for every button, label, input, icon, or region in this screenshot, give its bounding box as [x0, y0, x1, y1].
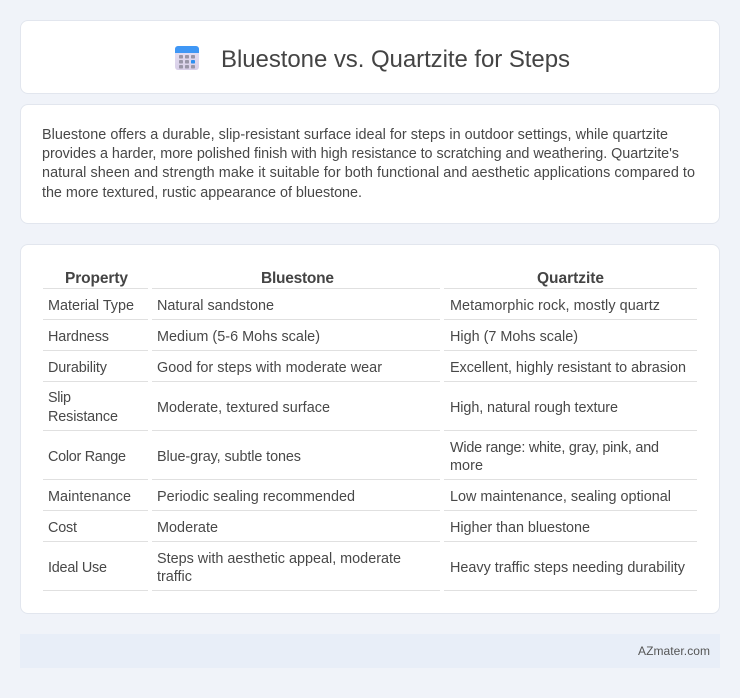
row: cost: Cost	[48, 520, 77, 536]
footer credit: AZmater.com	[638, 644, 710, 658]
table header: Property	[65, 270, 128, 287]
row: maintenance: Periodic sealing recommended	[157, 489, 355, 505]
row: slip resistance: Slip	[48, 390, 71, 406]
table header: Quartzite	[537, 270, 604, 287]
panel: footer	[20, 634, 720, 668]
row: color range: more	[450, 458, 483, 474]
row: color range: Color Range	[48, 449, 126, 465]
row: cost: Moderate	[157, 520, 218, 536]
row: durability: Excellent, highly resistant to abrasion	[450, 360, 686, 376]
text block: summary: Bluestone offers a durable, slip-resistant surface ideal for steps in outdoor settings, while quartzite	[42, 127, 668, 143]
row: ideal use: Ideal Use	[48, 560, 107, 576]
row: hardness	[48, 329, 578, 345]
row: color range: Wide range: white, gray, pink, and	[450, 440, 659, 456]
row: ideal use	[48, 551, 686, 585]
row: hardness: Medium (5-6 Mohs scale)	[157, 329, 320, 345]
row: material type	[48, 298, 660, 314]
table: comparison	[43, 270, 697, 590]
row: slip resistance	[48, 390, 618, 425]
icon: calendar	[175, 46, 199, 70]
row: slip resistance: Moderate, textured surface	[157, 400, 330, 416]
row: hardness: Hardness	[48, 329, 109, 345]
row: ideal use: traffic	[157, 569, 192, 585]
table header: Bluestone	[261, 270, 334, 287]
row: slip resistance: Resistance	[48, 409, 118, 425]
text block: summary: provides a harder, more polished finish with high resistance to scratching and weathering. Quartzite's	[42, 146, 679, 162]
row: durability: Good for steps with moderate wear	[157, 360, 382, 376]
row: material type: Natural sandstone	[157, 298, 274, 314]
row: color range	[48, 440, 659, 474]
row: cost	[48, 520, 590, 536]
row: cost: Higher than bluestone	[450, 520, 590, 536]
row: maintenance: Maintenance	[48, 489, 131, 505]
table header	[65, 270, 604, 287]
row: color range: Blue-gray, subtle tones	[157, 449, 301, 465]
row: durability: Durability	[48, 360, 108, 376]
panel: comparison table	[20, 244, 720, 614]
text block: summary: natural sheen and strength make it suitable for both functional and aesthetic applications compared to	[42, 165, 695, 181]
text block: summary	[42, 127, 695, 201]
panel: title	[20, 20, 720, 94]
text block: summary: the more textured, rustic appearance of bluestone.	[42, 185, 362, 201]
row: ideal use: Heavy traffic steps needing durability	[450, 560, 686, 576]
panel: summary	[20, 104, 720, 224]
row: slip resistance: High, natural rough texture	[450, 400, 618, 416]
row: maintenance	[48, 489, 671, 505]
row: durability	[48, 360, 686, 376]
row: ideal use: Steps with aesthetic appeal, moderate	[157, 551, 401, 567]
title: Bluestone vs. Quartzite for Steps	[221, 46, 570, 73]
row: hardness: High (7 Mohs scale)	[450, 329, 578, 345]
row: material type: Metamorphic rock, mostly quartz	[450, 298, 660, 314]
row: material type: Material Type	[48, 298, 134, 314]
row: maintenance: Low maintenance, sealing optional	[450, 489, 671, 505]
